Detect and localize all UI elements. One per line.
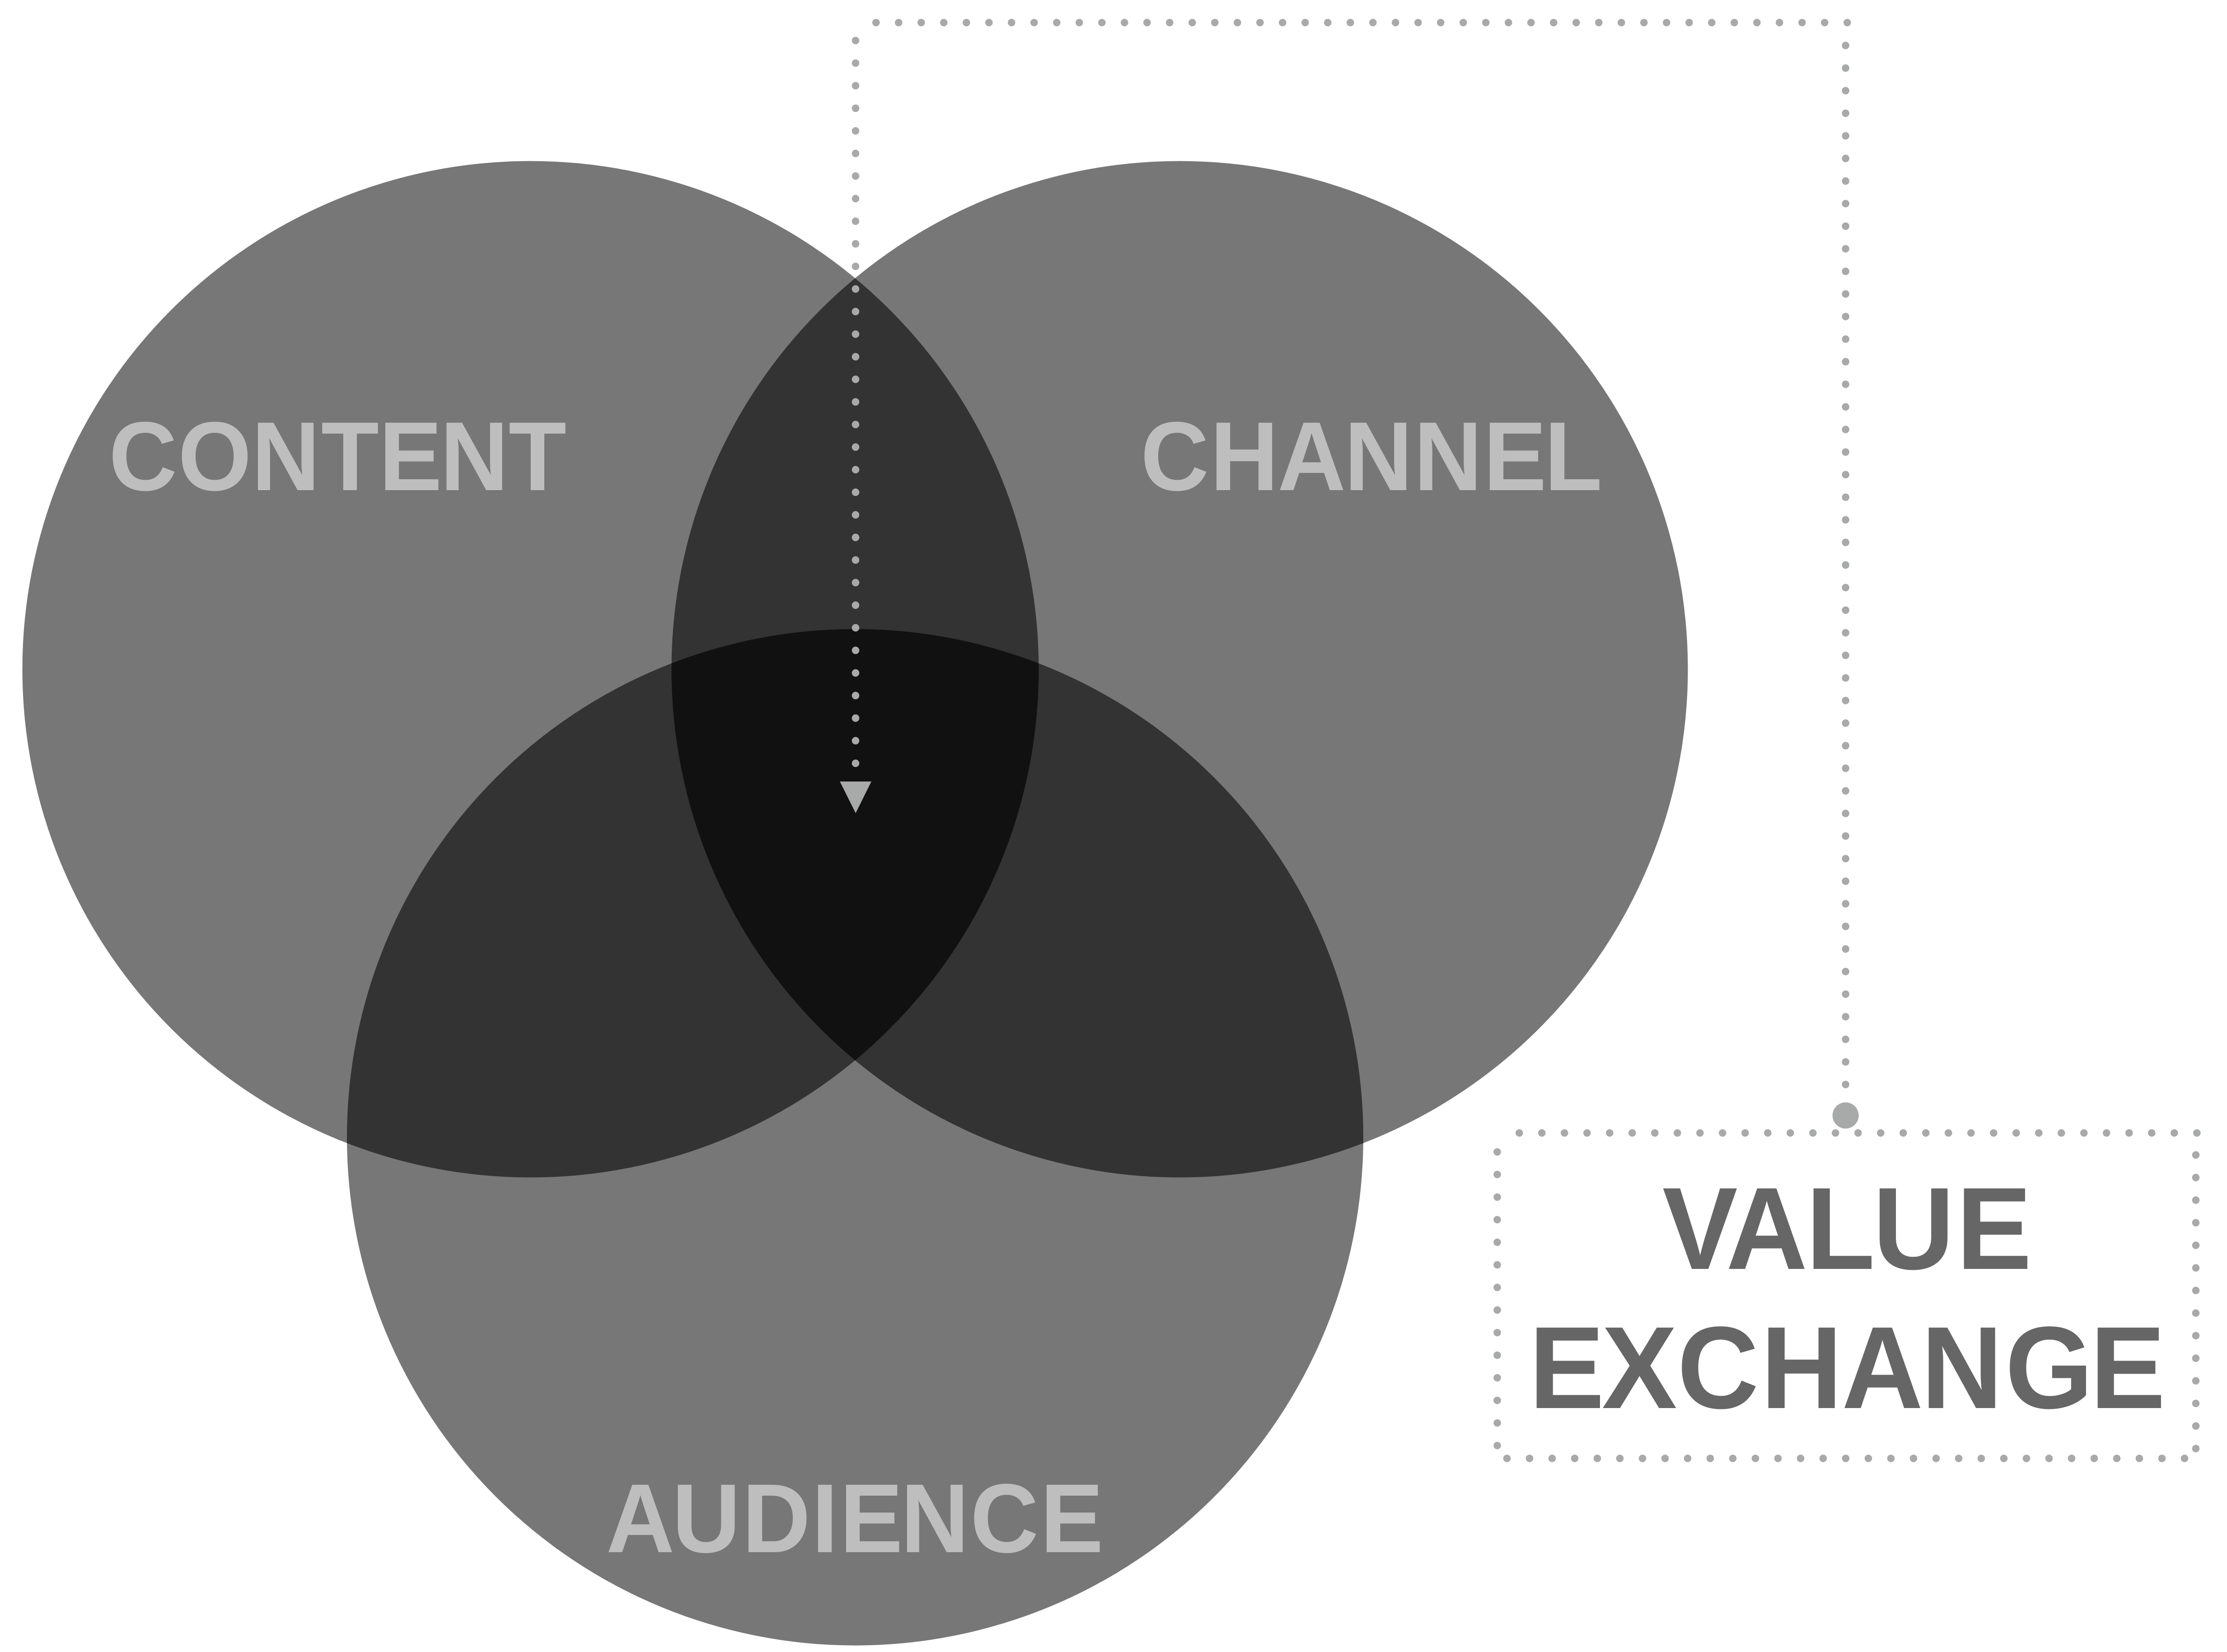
heading: value exchange [1529, 1163, 2166, 1433]
arrow: dotted connector from value exchange to venn centre [856, 23, 1852, 1085]
overlap: channel and audience [855, 663, 1363, 1177]
circle: content [23, 161, 1039, 1177]
arrow head [840, 782, 871, 813]
label: channel: CHANNEL [1141, 402, 1602, 511]
label: audience: AUDIENCE [606, 1464, 1104, 1573]
label: content: CONTENT [109, 402, 566, 511]
heading: value exchange: VALUE [1662, 1163, 2032, 1294]
overlap: content and audience [347, 663, 855, 1177]
circle: channel [671, 161, 1688, 1177]
heading: value exchange: EXCHANGE [1529, 1302, 2166, 1433]
overlap: centre of all three circles [671, 629, 1039, 1060]
connector start dot [1833, 1102, 1859, 1128]
circle: audience [347, 629, 1363, 1645]
overlap: content and channel [671, 278, 1039, 663]
dotted box around value exchange [1497, 1133, 2200, 1458]
